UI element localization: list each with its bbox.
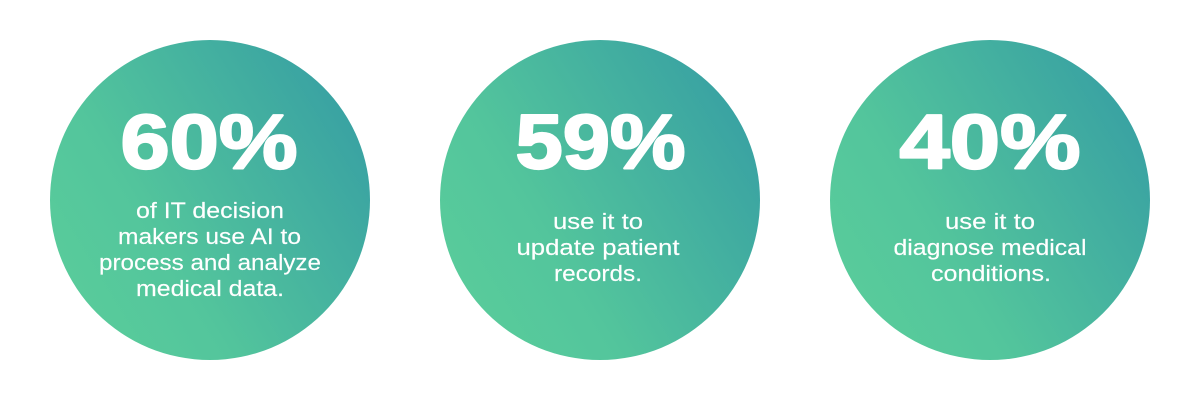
text: 60% description — [99, 198, 321, 301]
circle: 40% background — [830, 40, 1150, 360]
text: 40% description: conditions. — [931, 261, 1051, 286]
number: 40%: 40% — [900, 100, 1080, 186]
text: 60% description: medical data. — [136, 276, 284, 301]
text: 59% description: use it to — [553, 209, 643, 234]
text: 60% description: process and analyze — [99, 250, 321, 275]
panel: 40% statistic — [830, 40, 1150, 360]
text: 40% description: diagnose medical — [894, 235, 1086, 260]
panel: 59% statistic — [440, 40, 760, 360]
circle: 60% background — [50, 40, 370, 360]
text: 40% description: use it to — [945, 209, 1035, 234]
text: 59% description — [516, 209, 680, 286]
number: 59%: 59% — [516, 100, 686, 186]
circle: 59% background — [440, 40, 760, 360]
text: 40% description — [894, 209, 1086, 286]
text: 59% description: records. — [554, 261, 642, 286]
number: 60%: 60% — [120, 100, 298, 186]
text: 60% description: of IT decision — [136, 198, 284, 223]
text: 60% description: makers use AI to — [118, 224, 301, 249]
text: 59% description: update patient — [516, 235, 680, 260]
panel: 60% statistic — [50, 40, 370, 360]
